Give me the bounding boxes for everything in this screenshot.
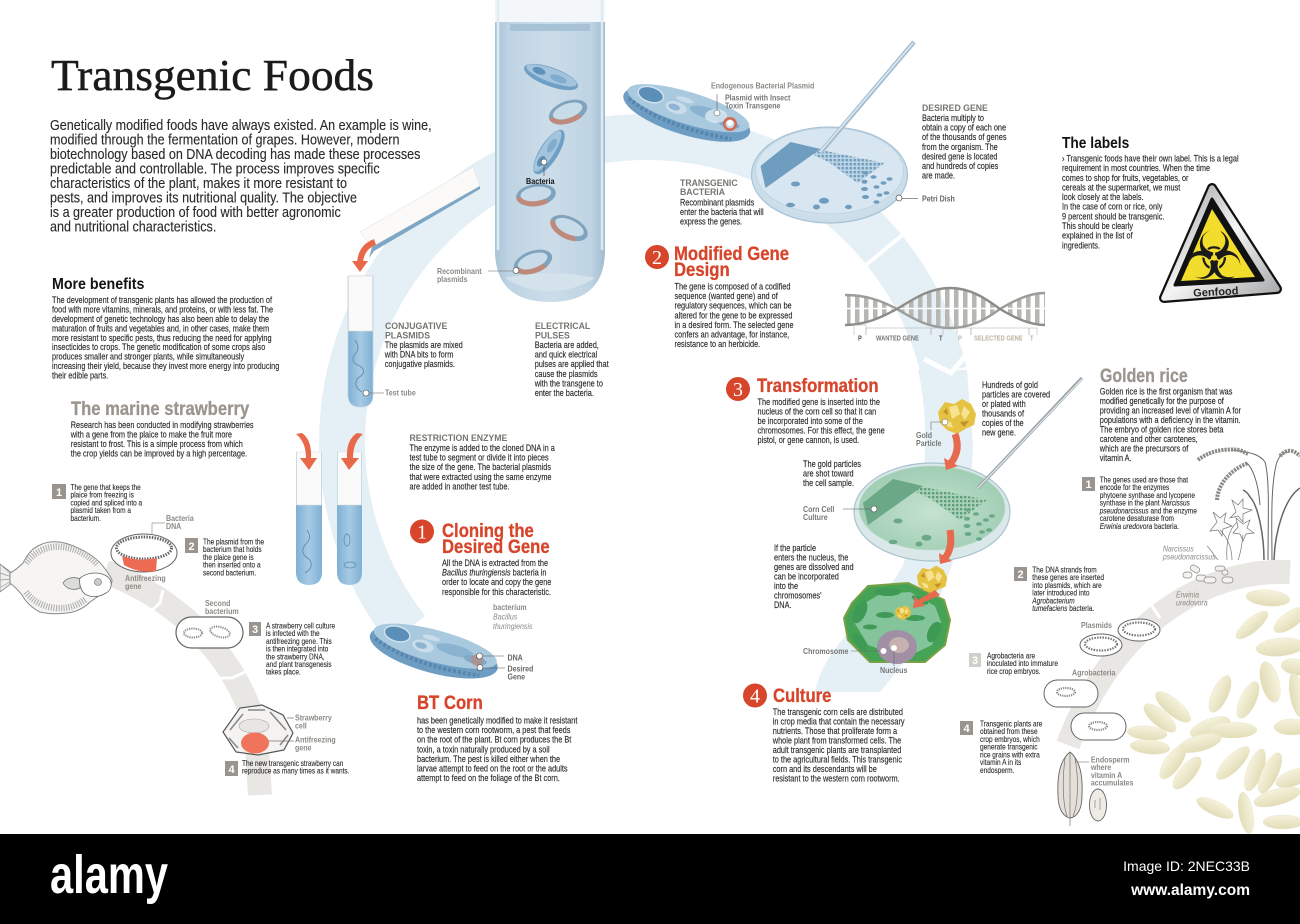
text: if the particle: If the particle (774, 542, 816, 553)
text: conjugative plasmids (384, 321, 463, 369)
text: transgenic bacteria: BACTERIA (680, 187, 725, 197)
gold particle over cell (917, 566, 947, 594)
text: more benefits: more resistant to specific pests, thus reducing the need for applying (52, 332, 272, 343)
rice step 4 (960, 719, 1044, 775)
intro text: Genetically modified foods have always existed. An example is wine, (50, 117, 432, 133)
label: plasmids: Plasmids (1081, 620, 1112, 630)
label: test tube: Test tube (385, 388, 416, 398)
strawberry step 2: 2 (188, 541, 195, 553)
step 2: modified gene design: resistance to an herbicide. (674, 338, 760, 349)
step 2: modified gene design: The gene is composed of a codified (674, 281, 791, 292)
step 1: cloning the desired gene: All the DNA is extracted from the (442, 557, 548, 568)
labels: DNA sequence (858, 335, 1034, 343)
panel: the labels (1062, 134, 1241, 251)
rice step 1 (1082, 475, 1199, 531)
rice step 2: Agrobacterium (1031, 596, 1075, 606)
text: hundreds of gold particles: copies of the (982, 417, 1024, 428)
label: antifreezing gene: Antifreezing (295, 735, 336, 745)
plant cell (844, 583, 950, 666)
strawberry step 2: then inserted onto a (203, 560, 261, 570)
text: restriction enzyme: test tube to segment or divide it into pieces (410, 452, 549, 463)
text: golden rice: carotene and other carotenes, (1100, 433, 1198, 444)
arrow: gold particle to dish (944, 434, 958, 470)
icon: biohazard label: Genfood (1193, 285, 1239, 300)
label: nucleus: Nucleus (880, 665, 907, 675)
panel: the labels: In the case of corn or rice, only (1062, 201, 1163, 212)
text: hundreds of gold particles: or plated with (982, 398, 1026, 409)
step 3: transformation (726, 375, 887, 445)
text: electrical pulses: PULSES (535, 330, 570, 341)
text: if the particle: chromosomes' (774, 590, 822, 601)
label: endosperm: vitamin A (1091, 770, 1123, 780)
rice step 4: endosperm. (980, 765, 1014, 775)
step 4: culture: corn and its descendants will be (773, 763, 877, 774)
icon: plaice fish (0, 542, 112, 614)
text: if the particle: genes are dissolved and (774, 561, 854, 572)
rice step 1: pseudonarcissus and the enzyme (1100, 506, 1197, 516)
rice step 2: into plasmids, which are (1032, 580, 1102, 590)
step 2: modified gene design: altered for the gene to be expressed (674, 309, 793, 321)
step 3: transformation: chromosomes. For this effect, the gene (758, 425, 885, 436)
text: conjugative plasmids: PLASMIDS (385, 330, 430, 341)
panel: the labels: 9 percent should be transgenic. (1062, 211, 1164, 222)
rice step 4: Transgenic plants are (980, 719, 1042, 729)
label: endosperm: where (1090, 763, 1112, 772)
rice step 4: rice grains with extra (980, 750, 1041, 760)
intro text: is a greater production of food with better agronomic (50, 204, 341, 220)
step 4: culture: to the agricultural fields. This transgenic (773, 754, 902, 765)
text: electrical pulses: ELECTRICAL (535, 321, 591, 331)
label: DNA: DNA (508, 653, 523, 663)
rice step 2: The DNA strands from (1032, 565, 1097, 575)
text: more benefits: The development of transgenic plants has allowed the production of (52, 294, 273, 305)
text: desired gene: Bacteria multiply to (922, 112, 984, 123)
text: restriction enzyme: RESTRICTION ENZYME (409, 433, 507, 443)
text: desired gene: and hundreds of copies (922, 160, 998, 171)
step 3: transformation: pistol, or gene cannon, is used. (758, 434, 859, 445)
icon: rice plant (1198, 449, 1300, 560)
text: transgenic bacteria: express the genes. (680, 216, 742, 227)
strawberry step 1: bacterium. (70, 513, 101, 523)
label: agrobacteria: Agrobacteria (1072, 668, 1116, 678)
strawberry step 4: The new transgenic strawberry can (242, 758, 343, 768)
strawberry step 1: The gene that keeps the (70, 482, 141, 492)
footer bar: alamy (50, 845, 168, 905)
step 2: modified gene design: Modified Gene (674, 243, 789, 264)
text: restriction enzyme (409, 433, 557, 492)
strawberry plasmid with red gene (111, 523, 177, 572)
text: hundreds of gold particles: thousands of (982, 408, 1025, 419)
step 1: cloning the desired gene: responsible for this characteristic. (442, 586, 551, 597)
label: erwinia: Erwinia (1176, 590, 1200, 600)
label: corn cell culture: Culture (803, 512, 828, 522)
icon: narcissus flower (1207, 499, 1254, 560)
text: conjugative plasmids: conjugative plasmids. (385, 358, 455, 369)
label: strawberry cell: cell (295, 721, 307, 731)
strawberry step 4 (225, 758, 350, 776)
band: golden rice process (1068, 572, 1290, 745)
BT corn: BT Corn (417, 692, 483, 713)
step 3: transformation: Transformation (757, 375, 879, 396)
BT corn: to the western corn rootworm, a pest that feeds (417, 724, 570, 735)
arrows into test tubes (296, 433, 363, 470)
panel: the labels: This should be clearly (1062, 220, 1134, 231)
step 4: culture (743, 684, 907, 784)
strawberry step 4: reproduce as many times as it wants. (242, 766, 350, 776)
text: marine strawberry: with a gene from the plaice to make the fruit more (70, 429, 232, 440)
strawberry step 2: bacterium that holds (203, 544, 262, 554)
rice step 3 (969, 651, 1058, 676)
BT corn: attempt to feed on the foliage of the Bt corn. (417, 772, 560, 783)
label: bacterium: bacterium (493, 602, 527, 612)
icon: erwinia bacteria (1183, 564, 1233, 583)
rice step 2: later introduced into (1032, 588, 1089, 598)
step 3: transformation: 3 (733, 379, 743, 401)
icon: rice seed (1058, 752, 1106, 826)
process ring: blue circular band (342, 137, 976, 692)
label: second bacterium: Second (205, 598, 231, 608)
footer bar: Image ID: 2NEC33B (1123, 858, 1250, 874)
strawberry step 3: A strawberry cell culture (266, 621, 335, 631)
step 3: transformation: be incorporated into some of the (758, 415, 863, 426)
text: restriction enzyme: are added in another test tube. (410, 481, 510, 492)
rice step 4: crop embryos, which (980, 734, 1040, 744)
footer bar: www.alamy.com (1130, 882, 1250, 899)
BT corn: toxin, a toxin naturally produced by a soil (417, 743, 550, 755)
text: gold particles shot: The gold particles (803, 458, 861, 469)
labels: DNA sequence: SELECTED GENE (974, 335, 1023, 343)
label: narcissus: Narcissus (1163, 544, 1194, 554)
text: restriction enzyme: that were extracted using the same enzyme (410, 471, 552, 482)
step 1: cloning the desired gene: Cloning the (442, 520, 534, 541)
text: more benefits: maturation of fruits and vegetables and, in other cases, make them (52, 322, 269, 334)
labels: DNA sequence: WANTED GENE (876, 335, 919, 343)
BT corn (417, 692, 579, 783)
label: plasmid with insect toxin transgene: Toxin Transgene (725, 101, 781, 110)
text: golden rice: providing an increased level of vitamin A for (1100, 405, 1241, 416)
strawberry step 3: takes place. (266, 667, 301, 677)
rice step 1: carotene desaturase from (1100, 514, 1174, 523)
strawberry step 1 (52, 482, 144, 523)
strawberry step 3: is then integrated into (266, 644, 328, 654)
heading: golden rice: Golden rice (1100, 365, 1188, 386)
label: endogenous bacterial plasmid: Endogenous Bacterial Plasmid (711, 81, 815, 91)
strawberry step 2: the plaice gene is (203, 552, 254, 562)
text: if the particle: into the (774, 580, 798, 591)
text: more benefits: their edible parts. (52, 370, 108, 381)
text: transgenic bacteria: enter the bacteria that will (680, 206, 764, 217)
panel: the labels: cereals at the supermarket, we must (1062, 182, 1181, 193)
text: desired gene: of the thousands of genes (922, 131, 1007, 142)
step 3: transformation: nucleus of the corn cell so that it can (758, 406, 877, 417)
label: second bacterium: bacterium (205, 606, 239, 616)
intro text: predictable and controllable. The process improves specific (50, 161, 380, 177)
big test tube with bacteria and plasmids (488, 0, 605, 302)
text: gold particles shot: the cell sample. (803, 477, 854, 488)
text: hundreds of gold particles: particles are covered (982, 389, 1050, 400)
text: transgenic bacteria: TRANSGENIC (680, 178, 738, 188)
arrow: particle into cell (913, 590, 940, 608)
strawberry step 2: second bacterium. (203, 568, 256, 578)
text: if the particle: enters the nucleus, the (774, 552, 849, 563)
step 2: modified gene design: sequence (wanted gene) and of (674, 290, 778, 301)
arrow: pipette to test tube (352, 242, 375, 272)
step 4: culture: nutrients. Those that proliferate form a (773, 725, 897, 736)
text: marine strawberry: Research has been conducted in modifying strawberries (71, 419, 254, 430)
step 2: modified gene design: in a desired form. The selected gene (674, 319, 794, 330)
icon: biohazard label: ☣ (1184, 218, 1244, 295)
label: bacteria DNA: DNA (166, 521, 182, 531)
rice step 3: Agrobacteria are (987, 651, 1035, 661)
step 2: modified gene design: 2 (652, 247, 662, 269)
icon: agrobacteria (1044, 680, 1126, 740)
step 4: culture: The transgenic corn cells are distributed (773, 706, 903, 717)
label: antifreezing gene: gene (125, 581, 142, 591)
step 4: culture: Culture (773, 685, 832, 706)
text: desired gene: are made. (922, 170, 955, 181)
step 2: modified gene design: confers an advantage, for instance, (674, 329, 789, 340)
DNA helix diagram (845, 288, 1045, 335)
panel: the labels: › Transgenic foods have their own label. This is a legal (1062, 153, 1239, 164)
panel: the labels: look closely at the labels. (1062, 191, 1144, 202)
text: marine strawberry: the crop yields can be improved by a high percentage. (71, 448, 247, 459)
BT corn: larvae attempt to feed on the root or the adults (417, 763, 568, 774)
step 1: cloning the desired gene: Desired Gene (442, 536, 550, 557)
label: antifreezing gene: Antifreezing (125, 573, 166, 583)
labels: DNA sequence: P (858, 335, 862, 343)
bacterium: top (617, 74, 756, 153)
rice step 1: synthase in the plant Narcissus (1100, 498, 1190, 508)
strawberry step 1: copied and spliced into a (70, 498, 143, 508)
text: electrical pulses: and quick electrical (535, 349, 597, 360)
text: transgenic bacteria: Recombinant plasmids (680, 197, 754, 208)
text: electrical pulses: pulses are applied that (535, 358, 609, 369)
text: desired gene: from the organism. The (922, 141, 998, 152)
rice step 4: vitamin A in its (980, 758, 1022, 767)
two test tubes (296, 452, 362, 585)
text: hundreds of gold particles: new gene. (982, 427, 1016, 438)
icon: second bacterium (176, 617, 243, 648)
rice step 1: Erwinia uredovora bacteria. (1100, 521, 1179, 531)
step 2: modified gene design (645, 243, 796, 349)
label: chromosome: Chromosome (803, 646, 849, 656)
text: electrical pulses: Bacteria are added, (535, 339, 599, 350)
intro text: characteristics of the plant, makes it more resistant to (50, 175, 347, 191)
text: conjugative plasmids: The plasmids are mixed (385, 339, 463, 350)
icon: biohazard label (1164, 188, 1277, 300)
band: strawberry process (105, 572, 260, 795)
text: desired gene: desired gene is located (922, 151, 998, 162)
text: conjugative plasmids: with DNA bits to form (384, 349, 453, 360)
text: more benefits: insecticides to crops. The genetic modification of some crops also (52, 341, 266, 352)
label: plasmid with insect toxin transgene: Plasmid with Insect (725, 93, 791, 103)
rice step 3: inoculated into immature (987, 659, 1058, 668)
text: golden rice: vitamin A. (1100, 452, 1132, 463)
text: golden rice: which are the precursors of (1099, 443, 1189, 454)
text: desired gene: obtain a copy of each one (922, 122, 1006, 133)
step 4: culture: resistant to the western corn rootworm. (773, 773, 900, 784)
text: electrical pulses: with the transgene to (534, 378, 603, 389)
label: bacterium: thuringiensis (493, 621, 533, 631)
text: electrical pulses: enter the bacteria. (535, 387, 594, 398)
label: bacteria: Bacteria (526, 176, 555, 186)
step 1: cloning the desired gene: 1 (417, 522, 427, 544)
arrow: dish to cell (939, 530, 952, 564)
label: bacterium: Bacillus (493, 612, 517, 622)
heading: marine strawberry: The marine strawberry (71, 398, 249, 419)
text: conjugative plasmids: CONJUGATIVE (385, 321, 447, 331)
footer bar (0, 834, 1300, 924)
strawberry step 3: antifreezing gene. This (266, 636, 332, 646)
panel: the labels: requirement in most countries. When the time (1062, 162, 1210, 173)
panel: the labels: ingredients. (1062, 239, 1100, 251)
text: if the particle: can be incorporated (774, 571, 839, 582)
label: narcissus: pseudonarcissus (1162, 552, 1216, 561)
strawberry step 1: 1 (56, 487, 62, 499)
icon: strawberry cell (223, 705, 294, 755)
labels: DNA sequence: T (1030, 335, 1034, 343)
text: electrical pulses: cause the plasmids (535, 368, 598, 379)
label: recombinant plasmids: plasmids (437, 274, 468, 284)
text: if the particle: DNA. (774, 599, 792, 610)
label: endosperm: Endosperm (1091, 755, 1130, 765)
step 1: cloning the desired gene: order to locate and copy the gene (442, 576, 552, 587)
step 2: modified gene design: regulatory sequences, which can be (674, 300, 792, 311)
step 4: culture: 4 (750, 686, 760, 708)
strawberry step 3: 3 (252, 624, 258, 636)
rice step 4: generate transgenic (980, 742, 1038, 752)
rice step 1: encode for the enzymes (1100, 483, 1170, 492)
step 2: modified gene design: Design (674, 259, 730, 280)
rice step 4: obtained from these (980, 727, 1038, 736)
rice step 1: The genes used are those that (1100, 475, 1188, 485)
BT corn: has been genetically modified to make it resistant (417, 715, 578, 726)
BT corn: on the root of the plant. Bt corn produces the Bt (417, 734, 572, 745)
icon: rice plasmids (1080, 619, 1160, 656)
text: transgenic bacteria (680, 178, 764, 227)
step 4: culture: whole plant from transformed cells. The (772, 735, 901, 746)
strawberry step 1: plasmid taken from a (70, 505, 132, 515)
label: bacteria DNA: Bacteria (166, 513, 194, 523)
rice step 2: these genes are inserted (1032, 573, 1104, 582)
label: recombinant plasmids: Recombinant (437, 266, 482, 276)
rice step 3: 3 (972, 655, 978, 667)
test tube: conjugative plasmids (348, 276, 384, 407)
label: desired gene: Desired (508, 664, 534, 674)
strawberry step 3: is infected with the (266, 628, 320, 638)
strawberry step 2 (185, 537, 266, 578)
label: gold particle: Gold (916, 430, 932, 440)
strawberry step 2: The plasmid from the (203, 537, 264, 547)
text: desired gene: DESIRED GENE (922, 103, 988, 113)
strawberry step 3: and plant transgenesis (266, 659, 332, 669)
strawberry step 4: 4 (228, 764, 235, 776)
intro text: pests, and improves its nutritional quality. The objective (50, 190, 357, 206)
title: Transgenic Foods (51, 51, 374, 100)
petri dish: blue (752, 42, 918, 223)
rice step 4: 4 (963, 723, 970, 735)
text: golden rice: populations with a deficiency in the vitamin. (1100, 414, 1241, 425)
label: antifreezing gene: gene (295, 743, 312, 753)
label: desired gene: Gene (508, 672, 526, 682)
text: more benefits: food with more vitamins, minerals, and proteins, or with less fat. The (52, 304, 273, 315)
strawberry step 3: the strawberry DNA, (266, 652, 325, 662)
label: bacterium (493, 602, 533, 631)
heading: more benefits: More benefits (52, 275, 144, 293)
text: more benefits: increasing their yield, because they invest more energy into producing (52, 360, 280, 371)
text: gold particles shot: are shot toward (803, 468, 854, 479)
text: golden rice: modified genetically for the purpose of (1100, 395, 1224, 406)
rice step 2: 2 (1017, 569, 1024, 581)
intro text: modified through the fermentation of grapes. However, modern (50, 132, 399, 148)
label: strawberry cell: Strawberry (295, 713, 332, 723)
bacterium: bottom (365, 614, 505, 689)
label: endosperm: accumulates (1091, 778, 1133, 788)
intro text: and nutritional characteristics. (50, 219, 216, 235)
BT corn: bacterium. The pest is killed either when the (417, 753, 560, 764)
text: restriction enzyme: the size of the gene. The bacterial plasmids (410, 461, 551, 472)
text: more benefits: development of genetic technology has also been able to delay the (52, 313, 269, 324)
label: erwinia: uredovora (1176, 598, 1208, 607)
label: corn cell culture: Corn Cell (803, 504, 834, 514)
rice grains (1126, 588, 1300, 835)
text: golden rice: The embryo of golden rice stores beta (1100, 424, 1224, 435)
text: golden rice: Golden rice is the first organism that was (1100, 386, 1232, 397)
strawberry step 3 (249, 621, 337, 677)
strawberry step 1: plaice from freezing is (70, 490, 134, 500)
gold particle (931, 399, 976, 434)
labels: DNA sequence: T (939, 335, 943, 343)
step 4: culture: in crop media that contain the necessary (773, 716, 905, 727)
step 1: cloning the desired gene: Bacillus thuringiensis bacteria in (442, 567, 546, 578)
rice step 1: 1 (1085, 479, 1092, 491)
text: restriction enzyme: The enzyme is added to the cloned DNA in a (410, 442, 555, 453)
text: desired gene (922, 103, 1009, 181)
rice step 3: rice crop embryos. (987, 666, 1041, 676)
panel: the labels: explained in the list of (1062, 230, 1133, 241)
text: hundreds of gold particles: Hundreds of gold (982, 379, 1038, 390)
step 1: cloning the desired gene (410, 520, 553, 597)
label: petri dish: Petri Dish (922, 194, 955, 204)
step 3: transformation: The modified gene is inserted into the (758, 396, 880, 407)
rice step 2 (1014, 565, 1106, 613)
text: more benefits: produces smaller and stronger plants, while simultaneously (52, 351, 245, 362)
panel: the labels: The labels (1062, 134, 1129, 152)
text: electrical pulses (534, 321, 611, 398)
petri dish: green (843, 378, 1082, 561)
panel: the labels: comes to shop for fruits, vegetables, or (1062, 172, 1189, 183)
intro text: biotechnology based on DNA decoding has made these processes (50, 146, 421, 162)
rice step 1: phytoene synthase and lycopene (1100, 490, 1195, 500)
labels: DNA sequence: P (958, 335, 962, 343)
label: gold particle: Particle (916, 438, 942, 448)
text: marine strawberry: resistant to frost. This is a simple process from which (71, 438, 243, 449)
step 4: culture: adult transgenic plants are transplanted (773, 744, 902, 755)
pipette (360, 167, 480, 258)
rice step 2: tumefaciens bacteria. (1032, 604, 1094, 613)
